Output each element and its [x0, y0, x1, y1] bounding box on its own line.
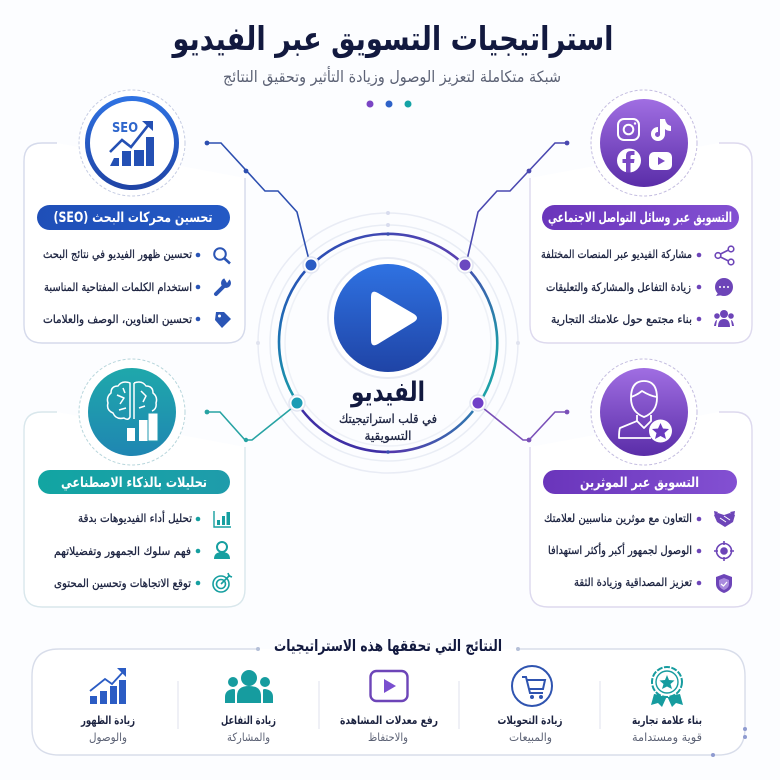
icon: user — [214, 542, 230, 559]
heading pill: influencers — [543, 470, 737, 494]
list: influencer items: الوصول لجمهور أكبر وأكثر استهدافا — [548, 542, 692, 558]
result: engagement: زيادة التفاعل — [221, 713, 276, 727]
icon: cart in circle — [512, 666, 552, 706]
list: influencer items — [544, 511, 735, 593]
heading pill: AI analytics — [38, 470, 230, 494]
list: AI items: فهم سلوك الجمهور وتفضيلاتهم — [54, 544, 191, 559]
result: watch rates: والاحتفاظ — [368, 730, 408, 745]
list: SEO items — [43, 247, 231, 328]
result: engagement — [221, 670, 276, 745]
panel: AI analytics — [24, 359, 245, 607]
hub label: الفيديو — [349, 377, 425, 408]
list: influencer items: تعزيز المصداقية وزيادة الثقة — [574, 575, 692, 590]
icon: SEO growth chart — [79, 90, 185, 196]
result: brand: بناء علامة تجارية — [632, 713, 702, 727]
result: conversions: زيادة التحويلات — [498, 713, 562, 728]
list: social media items: زيادة التفاعل والمشاركة والتعليقات — [546, 280, 691, 295]
dividers — [178, 681, 600, 729]
list: social media items — [541, 246, 734, 327]
icon: bar chart — [214, 511, 231, 527]
icon: influencer with star — [591, 359, 697, 465]
icon: SEO growth chart: SEO — [112, 121, 138, 136]
panel: results — [32, 637, 747, 757]
panel: social media — [530, 90, 752, 343]
result: visibility: زيادة الظهور — [80, 713, 135, 728]
hub label — [339, 377, 437, 444]
icon: magnifier — [214, 248, 230, 264]
icon: people group — [225, 670, 273, 703]
connector: SEO — [205, 141, 319, 273]
title: استراتيجيات التسويق عبر الفيديو — [171, 19, 613, 59]
hub label: التسويقية — [364, 428, 412, 444]
icon: social platforms — [591, 90, 697, 196]
icon: community — [714, 310, 734, 327]
list: social media items: بناء مجتمع حول علامتك التجارية — [551, 312, 692, 327]
heading pill: SEO — [37, 205, 230, 230]
panel: SEO — [24, 90, 245, 343]
hub label: في قلب استراتيجيتك — [339, 411, 437, 427]
icon: shield — [716, 574, 732, 593]
icon: brain with bars — [79, 359, 185, 465]
list: AI items: توقع الاتجاهات وتحسين المحتوى — [54, 576, 191, 591]
central hub — [256, 211, 520, 473]
heading pill: influencers: التسويق عبر الموثرين — [580, 475, 699, 491]
list: social media items: مشاركة الفيديو عبر المنصات المختلفة — [541, 247, 692, 262]
result: watch rates: رفع معدلات المشاهدة — [340, 713, 438, 727]
connector: AI — [205, 395, 305, 442]
icon: chat bubble — [715, 278, 733, 296]
list: SEO items: استخدام الكلمات المفتاحية المناسبة — [44, 280, 192, 294]
result: brand — [632, 667, 702, 745]
decorative title dots — [366, 100, 412, 108]
result: conversions: والمبيعات — [509, 730, 552, 745]
result: visibility: والوصول — [89, 730, 127, 745]
icon: tags — [215, 312, 231, 328]
list: SEO items: تحسين ظهور الفيديو في نتائج البحث — [43, 247, 192, 262]
results heading: النتائج التي تحققها هذه الاستراتيجيات — [274, 637, 502, 656]
icon: play window — [370, 671, 408, 701]
main ring arcs — [279, 234, 497, 452]
icon: crosshair target — [714, 541, 734, 561]
list: AI items — [54, 510, 232, 592]
subtitle: شبكة متكاملة لتعزيز الوصول وزيادة التأثير وتحقيق النتائج — [223, 66, 561, 87]
icon: target — [213, 573, 232, 592]
heading pill: AI analytics: تحليلات بالذكاء الاصطناعي — [61, 475, 207, 491]
list: AI items: تحليل أداء الفيديوهات بدقة — [78, 510, 192, 526]
icon: share — [715, 246, 734, 265]
connector: influencers — [470, 395, 569, 442]
result: watch rates — [340, 671, 438, 745]
icon: wrench — [216, 277, 231, 294]
panel: influencers — [530, 359, 752, 607]
result: conversions — [498, 666, 562, 745]
heading pill: SEO: تحسين محركات البحث (SEO) — [53, 210, 212, 226]
connector: social media — [457, 141, 569, 273]
icon: rising bars — [90, 668, 126, 704]
list: SEO items: تحسين العناوين، الوصف والعلامات — [43, 312, 192, 327]
result: visibility — [80, 668, 135, 745]
icon: award badge — [651, 667, 683, 707]
result: engagement: والمشاركة — [227, 730, 270, 745]
result: brand: قوية ومستدامة — [632, 730, 702, 745]
list: influencer items: التعاون مع موثرين مناسبين لعلامتك — [544, 511, 692, 526]
icon: handshake — [714, 511, 735, 527]
play button — [328, 258, 448, 378]
heading pill: social media — [542, 205, 739, 230]
